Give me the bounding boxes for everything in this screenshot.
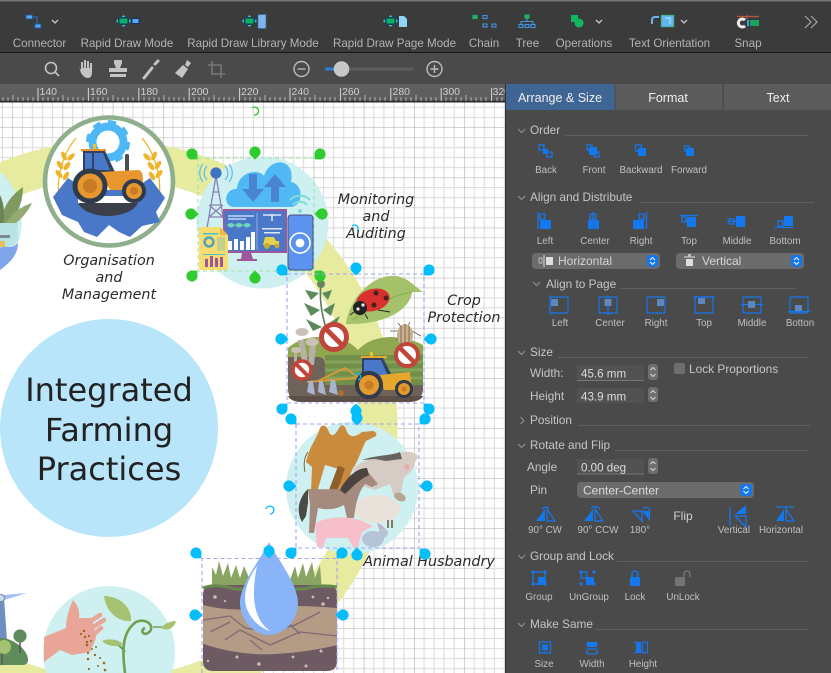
dropdown: horizontal [532, 253, 660, 269]
labels: align to page: Middle [738, 318, 767, 329]
icon: stamp [109, 60, 127, 77]
toolbar labels: Connector [13, 37, 66, 50]
icon: operations [571, 15, 602, 28]
icon: hand [78, 60, 92, 78]
icon: overflow chevrons [805, 16, 817, 28]
icon: zoom out [294, 62, 309, 76]
section: position [520, 413, 810, 427]
ruler: 240 [292, 86, 309, 98]
toolbar labels: Tree [516, 37, 539, 50]
toolbar labels: Snap [734, 37, 762, 50]
secondary toolbar [0, 53, 831, 84]
field: height [577, 387, 658, 404]
ruler: 260 [342, 86, 360, 98]
labels: group and lock [525, 592, 700, 603]
icon: camel [304, 425, 376, 492]
tabs [506, 84, 831, 110]
panel: water management [203, 542, 337, 671]
section: size: Height [530, 389, 565, 403]
label: organisation and management: Management [62, 287, 157, 303]
panel: crop protection [288, 276, 500, 402]
icon: wheat [54, 138, 164, 204]
labels: order: Backward [619, 165, 663, 176]
icon: monitor dashboard [223, 209, 287, 261]
icon: leaf with ladybug [346, 276, 423, 324]
icon: eyedropper [144, 61, 158, 78]
toolbar labels [13, 37, 762, 50]
icon: tree [519, 15, 535, 28]
labels: group and lock: Lock [625, 592, 645, 603]
ruler: 280 [392, 86, 410, 98]
tabs: Text [767, 91, 790, 105]
icon: sheep [354, 491, 407, 528]
label: crop protection [428, 293, 500, 326]
labels: group and lock: UnLock [666, 592, 700, 603]
label: monitoring and auditing [338, 192, 414, 242]
labels: align to page: Left [552, 318, 568, 329]
label: organisation and management [62, 253, 157, 303]
labels: align: Middle [723, 236, 752, 247]
icon: rapid draw page mode [383, 15, 407, 27]
section: rotate and flip [518, 438, 808, 536]
labels: align: Top [681, 236, 697, 247]
labels: align to page: Center [595, 318, 625, 329]
label: crop protection: Crop [447, 293, 481, 309]
label: monitoring and auditing: and [363, 209, 390, 225]
labels: align: Center [580, 236, 610, 247]
icon: snap [737, 15, 759, 27]
icon: text orientation [652, 15, 687, 27]
icon: soil layers [203, 585, 337, 671]
canvas background grid [0, 101, 506, 673]
icon: rapid draw library mode [242, 14, 266, 28]
icon: chain [473, 16, 496, 27]
section: position: Position [530, 413, 572, 427]
tabs: Arrange & Size [518, 91, 602, 105]
label: crop protection: Protection [428, 310, 500, 326]
field: angle: 0.00 deg [581, 462, 626, 474]
label: animal husbandry: Animal Husbandry [362, 554, 495, 570]
icons: make same [540, 642, 648, 654]
labels: make same: Size [534, 659, 554, 670]
icon: rapid draw mode [116, 15, 139, 27]
central circle title [0, 319, 218, 537]
labels: make same: Height [629, 659, 657, 670]
icon: tractor and plough [307, 352, 412, 397]
toolbar labels: Rapid Draw Mode [81, 37, 173, 50]
icon: phone with wifi [288, 196, 313, 270]
icon: crop [208, 61, 225, 78]
labels: make same: Width [579, 659, 605, 670]
icon: hand with seeds [44, 600, 106, 671]
right panel [505, 84, 831, 673]
labels: order: Front [583, 165, 606, 176]
subsection: align to page: Align to Page [546, 277, 617, 291]
icon: broom [175, 60, 191, 78]
icon: large blue gear [53, 178, 165, 237]
labels: align: Left [537, 236, 553, 247]
diagram ring band [0, 160, 378, 673]
ruler: 200 [191, 86, 209, 98]
panel: organisation and management [45, 118, 173, 303]
icon: signal tower [200, 164, 232, 228]
labels: rotate and flip: 90° CCW [578, 525, 619, 536]
icon: prohibition signs [293, 324, 418, 379]
field: height: 43.9 mm [581, 390, 626, 404]
icon: mushrooms [291, 328, 318, 365]
labels: align to page: Right [645, 318, 668, 329]
icon: cow [353, 452, 418, 497]
section: group and lock: Group and Lock [530, 549, 614, 563]
field: angle [577, 458, 658, 474]
icons: align to page [550, 295, 810, 315]
icon: pig [315, 518, 373, 547]
ruler: 140 [40, 86, 57, 98]
icon: tractor [75, 144, 144, 201]
label: organisation and management: Organisation [63, 253, 155, 269]
icon: magnifier [46, 62, 59, 76]
icon: zoom in [427, 62, 442, 76]
section: align and distribute [518, 190, 814, 329]
icon: water drop [240, 542, 298, 635]
label: monitoring and auditing: Monitoring [338, 192, 414, 208]
icons: rotate and flip [536, 505, 794, 527]
toolbar labels: Operations [556, 37, 613, 50]
section: order [518, 123, 808, 176]
toolbar labels: Text Orientation [629, 37, 710, 50]
section: order: Order [530, 123, 560, 137]
icons: group and lock [531, 570, 690, 586]
icon: beetle [390, 322, 421, 346]
labels: group and lock: UnGroup [569, 592, 609, 603]
toolbar labels: Chain [469, 37, 499, 50]
ruler: 180 [140, 86, 158, 98]
labels: align: Right [630, 236, 653, 247]
labels: order [535, 165, 707, 176]
zoom slider [325, 61, 414, 77]
section: rotate and flip: Rotate and Flip [530, 438, 610, 452]
labels: group and lock: Group [525, 592, 553, 603]
section: group and lock [518, 549, 808, 603]
panel: animal husbandry [286, 422, 495, 570]
labels: make same [534, 659, 657, 670]
icon: grass [212, 561, 322, 590]
field: width [577, 364, 658, 381]
ruler: 320 [492, 86, 510, 98]
section: make same: Make Same [530, 617, 593, 631]
labels: order: Back [535, 165, 557, 176]
field: width: 45.6 mm [581, 368, 626, 380]
top toolbar [0, 0, 831, 53]
section: rotate and flip: Pin [530, 483, 547, 497]
icon: light blue gear [88, 122, 128, 162]
selection: monitoring shape [184, 107, 328, 284]
icons: align [538, 212, 794, 229]
label: organisation and management: and [96, 270, 123, 286]
dropdown: vertical: Vertical [702, 254, 741, 268]
labels: rotate and flip [528, 509, 803, 536]
icons: order [539, 145, 694, 157]
icon: seedling [102, 596, 176, 673]
labels: rotate and flip: Flip [673, 509, 693, 523]
dropdown: pin [577, 482, 754, 498]
labels: rotate and flip: Horizontal [759, 525, 803, 536]
section: make same [518, 617, 808, 670]
panel: monitoring and auditing [196, 156, 414, 288]
icon: field landscape [288, 337, 423, 402]
labels: rotate and flip: Vertical [718, 525, 750, 536]
ruler: 160 [90, 86, 108, 98]
ruler: 220 [241, 86, 259, 98]
dropdown: vertical [676, 253, 804, 269]
subsection: align to page [533, 277, 814, 329]
toolbar labels: Rapid Draw Library Mode [187, 37, 319, 50]
icon: rabbit [362, 523, 388, 547]
icon: cloud with arrows [226, 162, 301, 207]
icon: plant [304, 280, 340, 331]
central circle title: Farming [45, 411, 173, 449]
labels: rotate and flip: 180° [630, 525, 650, 536]
icon: windmill and trees [0, 593, 28, 665]
central circle title: Integrated [25, 371, 193, 409]
toolbar labels: Rapid Draw Page Mode [333, 37, 456, 50]
labels: order: Forward [671, 165, 707, 176]
dropdown: horizontal: Horizontal [558, 254, 612, 268]
labels: align [537, 236, 801, 247]
section: rotate and flip: Angle [527, 460, 558, 474]
tabs: Format [648, 91, 688, 105]
ruler [0, 84, 510, 102]
dropdown: pin: Center-Center [583, 484, 659, 498]
icon: partial plant in water (left edge) [0, 155, 32, 287]
section: align and distribute: Align and Distribute [530, 190, 633, 204]
section: size [518, 345, 809, 404]
icon: report document [199, 227, 228, 270]
labels: align: Bottom [769, 236, 801, 247]
ruler: 300 [442, 86, 460, 98]
panel: seeding and plant [43, 586, 176, 673]
labels: align to page: Top [696, 318, 712, 329]
section: size: Width: [530, 366, 563, 380]
central circle title: Practices [37, 450, 181, 488]
icon: horse [299, 468, 378, 533]
checkbox: lock proportions: Lock Proportions [689, 362, 778, 376]
section: size: Size [530, 345, 553, 359]
labels: rotate and flip: 90° CW [528, 525, 563, 536]
selection: crop, animal and water shapes [188, 225, 437, 673]
labels: align to page: Botton [786, 318, 814, 329]
icon: connector [26, 15, 58, 28]
labels: align to page [552, 318, 814, 329]
label: monitoring and auditing: Auditing [345, 226, 406, 242]
